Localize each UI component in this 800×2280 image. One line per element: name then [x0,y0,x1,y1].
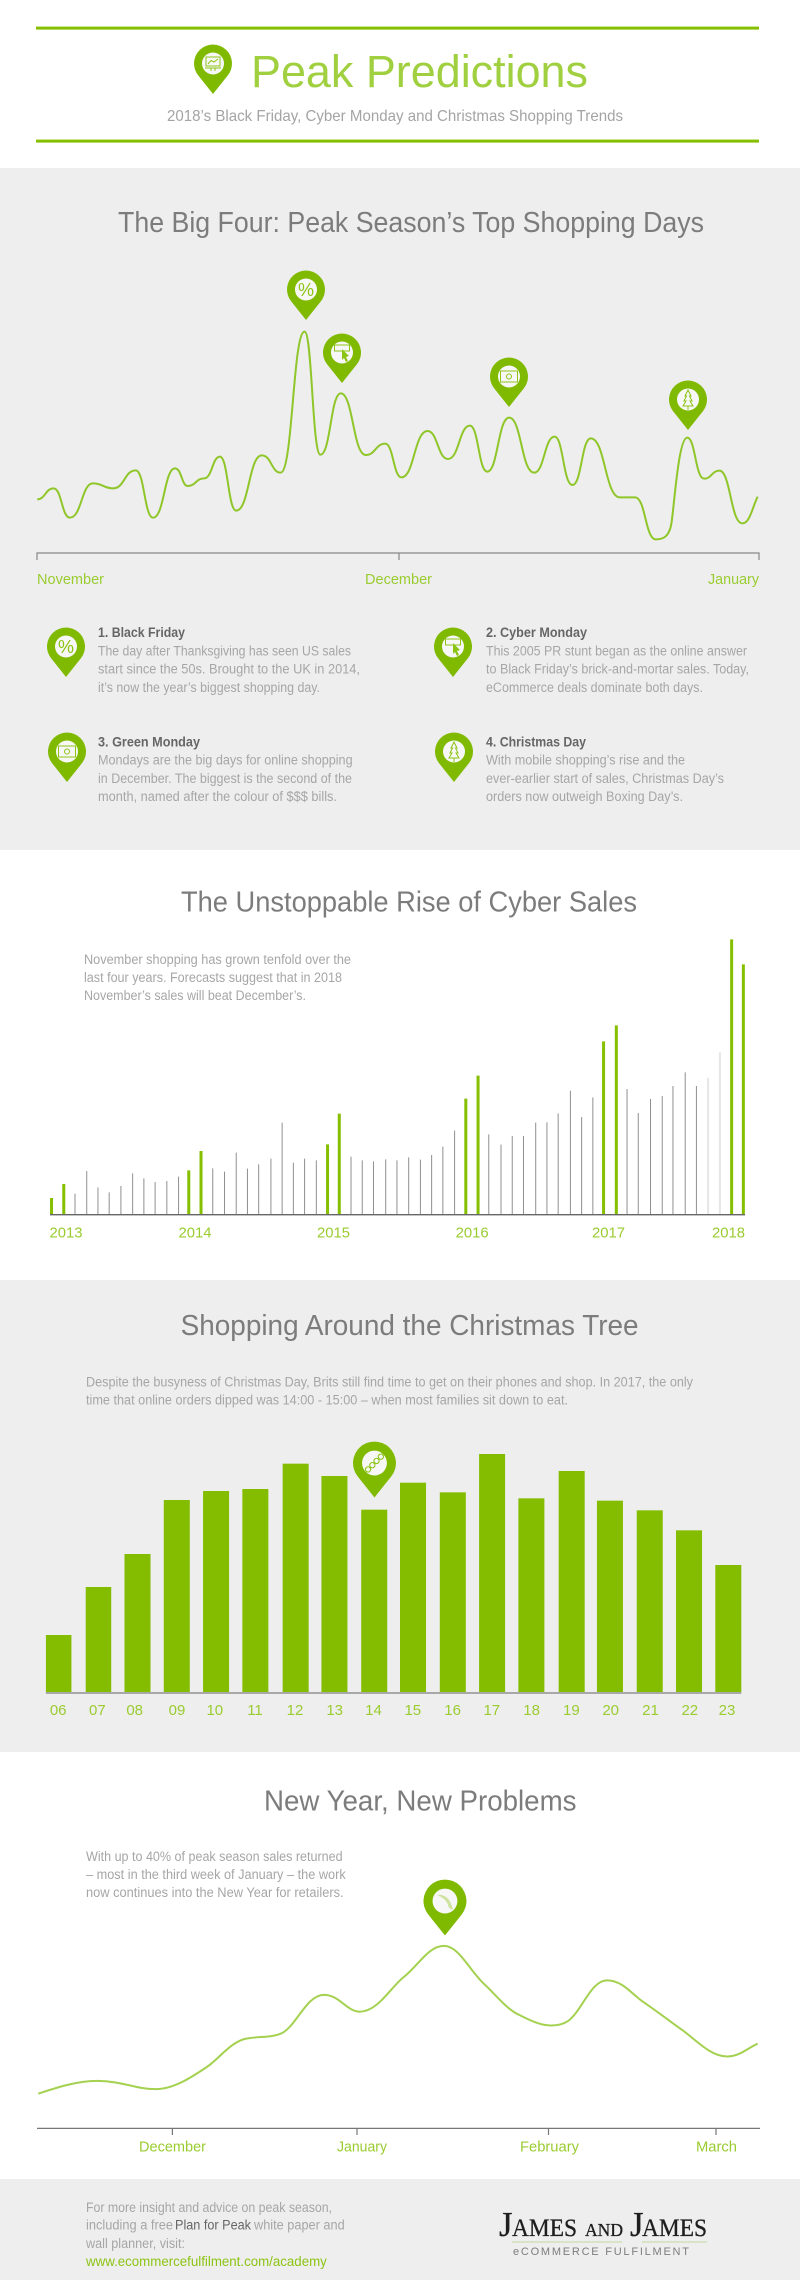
hour labels: 21 [642,1702,659,1719]
text block: call to action: Plan for Peak [175,2218,251,2233]
icon: black friday pin [287,271,325,320]
hour labels: 23 [719,1702,735,1719]
icon: tree pin [435,733,473,782]
year labels: 2016 [456,1225,489,1242]
icon: monitor cursor pin [434,628,472,677]
text block: christmas day: 4. Christmas Day [486,734,586,750]
axis labels: January [708,571,759,588]
logo [499,2205,707,2258]
hour labels: 12 [287,1702,303,1719]
text block: intro [86,1375,693,1408]
text block: call to action: including a free [86,2218,173,2233]
axis labels: December [139,2138,206,2156]
hour labels: 13 [326,1702,343,1719]
text block: cyber monday: eCommerce deals dominate both days. [486,680,703,695]
text block: intro: now continues into the New Year for retailers. [86,1885,344,1900]
text block: black friday: 1. Black Friday [98,624,185,640]
text block: green monday [48,733,353,804]
hour labels: 07 [89,1702,106,1719]
icon: banknote pin [48,733,86,782]
text block: intro: With up to 40% of peak season sales returned [86,1849,343,1864]
hour labels: 10 [206,1702,223,1719]
text block: green monday: 3. Green Monday [98,734,200,750]
chart axis [37,2128,760,2135]
year labels: 2018 [712,1225,745,1242]
text block: green monday: month, named after the colour of $$$ bills. [98,789,337,804]
text block: christmas day: ever-earlier start of sales, Christmas Day’s [486,771,724,786]
text block: intro: Despite the busyness of Christmas Day, Brits still find time to get on their phones and shop. In 2017, the only [86,1375,693,1390]
year labels: 2015 [317,1225,350,1242]
panel: christmas tree [46,1310,741,1719]
hour labels: 06 [50,1702,67,1719]
text block: intro [86,1849,346,1900]
text block: green monday: in December. The biggest is the second of the [98,771,352,786]
text block: black friday: it’s now the year’s biggest shopping day. [98,680,320,695]
text block: cyber monday [434,624,749,695]
bar chart: monthly sales [52,939,743,1214]
hour labels: 17 [483,1702,500,1719]
text block: call to action: wall planner, visit: [85,2236,185,2251]
hour labels: 14 [365,1702,382,1719]
icon: black friday pin: % [298,280,314,300]
icon: christmas day pin [669,381,707,430]
axis labels [139,2138,737,2156]
logo: J [630,2205,644,2244]
icon: cyber monday pin [323,334,361,383]
year labels: 2017 [592,1225,625,1242]
title: Peak Predictions [251,46,588,97]
text block: black friday: The day after Thanksgiving has seen US sales [98,644,351,659]
icon: percent pin [47,628,85,677]
heading: The Big Four: Peak Season’s Top Shopping Days [118,207,704,239]
text block: cyber monday: to Black Friday’s brick-and-mortar sales. Today, [486,662,749,677]
text block: intro: – most in the third week of January – the work [86,1867,346,1882]
hour labels: 11 [247,1702,263,1719]
axis labels: December [365,571,432,588]
year labels: 2013 [50,1225,82,1242]
text block: black friday [47,624,360,695]
hour labels: 08 [126,1702,143,1719]
chart axis [37,553,759,560]
axis labels: March [696,2138,737,2156]
text block: intro: November shopping has grown tenfold over the [84,952,351,967]
logo: eCOMMERCE FULFILMENT [513,2246,689,2258]
line chart: daily shopping peaks [37,332,758,539]
heading: New Year, New Problems [264,1786,576,1818]
axis labels: November [37,571,104,588]
bar chart: orders by hour [46,1454,741,1694]
header [36,27,759,143]
text block: cyber monday: 2. Cyber Monday [486,624,587,640]
line chart: returns [38,1946,758,2094]
text block: intro: November’s sales will beat December’s. [84,988,306,1003]
hour labels: 22 [681,1702,698,1719]
text block: call to action: white paper and [253,2218,345,2233]
icon: green monday pin [490,358,528,407]
logo: AMES [642,2215,707,2242]
heading: Shopping Around the Christmas Tree [181,1310,639,1342]
panel: the big four [37,207,759,804]
panel: new year [37,1786,760,2156]
text block: intro: time that online orders dipped was 14:00 - 15:00 – when most families sit down to eat. [86,1393,568,1408]
text block: cyber monday: This 2005 PR stunt began as the online answer [486,644,747,659]
hour labels: 20 [602,1702,619,1719]
text block: call to action: www.ecommercefulfilment.com/academy [85,2254,327,2269]
logo: AND [585,2220,623,2240]
hour labels: 09 [169,1702,185,1719]
text block: green monday: Mondays are the big days for online shopping [98,753,353,768]
axis labels: January [337,2138,387,2156]
subtitle: 2018’s Black Friday, Cyber Monday and Christmas Shopping Trends [167,108,623,125]
hour labels: 18 [523,1702,540,1719]
logo: AMES [512,2215,577,2242]
text block: christmas day: orders now outweigh Boxing Day’s. [486,789,683,804]
icon: header pin with monitor [194,45,232,94]
text block: christmas day: With mobile shopping’s rise and the [486,753,685,768]
text block: call to action [85,2200,345,2269]
heading: The Unstoppable Rise of Cyber Sales [181,887,637,919]
footer [85,2200,707,2269]
year labels: 2014 [178,1225,212,1242]
logo: J [499,2205,513,2244]
axis labels: February [520,2138,579,2156]
text block: call to action: For more insight and advice on peak season, [86,2200,332,2215]
text block: christmas day [435,733,724,804]
hour labels: 15 [404,1702,421,1719]
chart baseline [50,1214,745,1215]
text block: intro [84,952,351,1003]
icon: boomerang pin [424,1880,466,1936]
hour labels: 19 [563,1702,580,1719]
year labels [50,1225,745,1242]
hour labels [50,1702,735,1719]
text block: intro: last four years. Forecasts suggest that in 2018 [84,970,342,985]
icon: percent pin: % [58,637,74,657]
panel: rise of cyber sales [50,887,745,1242]
text block: black friday: start since the 50s. Brought to the UK in 2014, [98,662,360,677]
axis labels [37,571,759,588]
hour labels: 16 [444,1702,461,1719]
icon: chain pin [353,1442,396,1498]
